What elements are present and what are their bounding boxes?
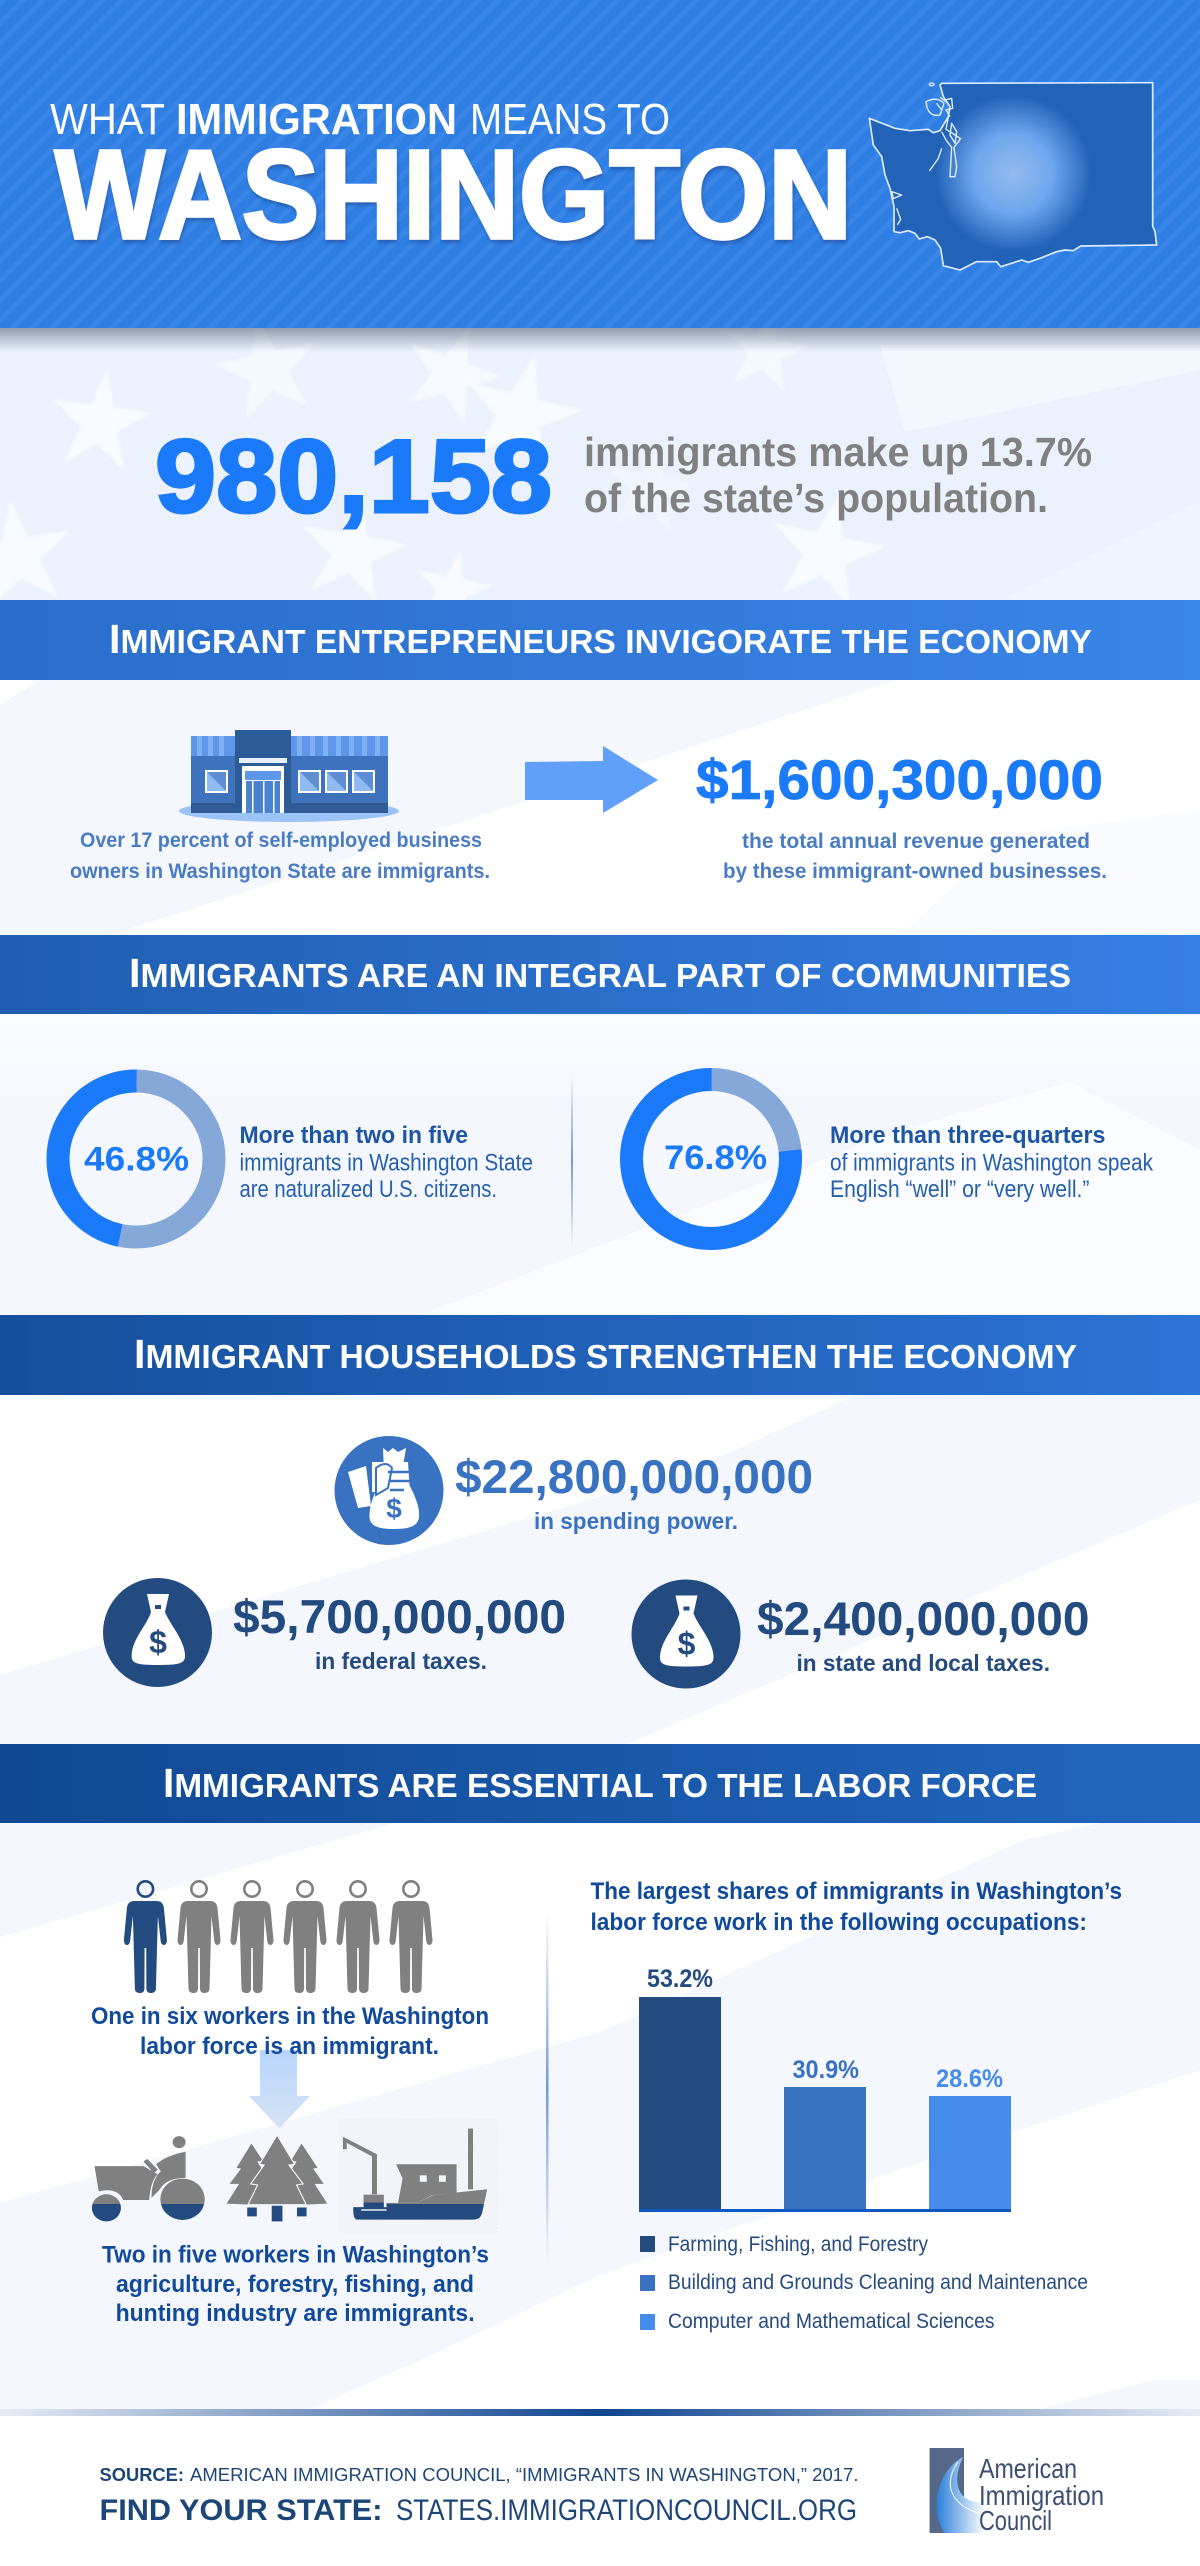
chart heading: The largest shares of immigrants in Washington’s xyxy=(590,1878,1122,1905)
stat description: immigrants make up 13.7% xyxy=(584,429,1092,475)
section header: labor force xyxy=(0,1744,1200,1823)
section header: households: IMMIGRANT HOUSEHOLDS STRENGTHEN THE ECONOMY xyxy=(134,1331,1077,1377)
title line 1: WHAT xyxy=(50,96,165,144)
stat description: of the state’s population. xyxy=(584,475,1048,521)
icon: tractor xyxy=(92,2136,205,2221)
find your state line: STATES.IMMIGRATIONCOUNCIL.ORG xyxy=(396,2494,857,2527)
text: self-employed business owners: Over 17 percent of self-employed business xyxy=(80,828,482,852)
chart heading: labor force work in the following occupations: xyxy=(590,1909,1087,1936)
icon: storefront xyxy=(179,730,399,822)
federal taxes figure: in federal taxes. xyxy=(315,1648,487,1674)
stat description xyxy=(584,429,1092,521)
logo: American Immigration Council: Council xyxy=(979,2505,1052,2536)
donut chart: 76.8 percent xyxy=(632,1080,790,1238)
footer xyxy=(100,2448,1104,2536)
logo: American Immigration Council: American xyxy=(979,2453,1077,2484)
text: one in six workers xyxy=(91,2003,489,2060)
source line: AMERICAN IMMIGRATION COUNCIL, “IMMIGRANTS IN WASHINGTON,” 2017. xyxy=(190,2465,858,2485)
icon: money bag in hand: $ xyxy=(386,1493,402,1524)
section header: households xyxy=(0,1315,1200,1395)
section header: entrepreneurs xyxy=(0,600,1200,680)
federal taxes figure: $5,700,000,000 xyxy=(233,1590,566,1643)
donut chart: 46.8 percent xyxy=(58,1081,214,1237)
find your state line: FIND YOUR STATE: xyxy=(100,2494,382,2527)
arrow: down xyxy=(249,2050,310,2128)
spending power figure xyxy=(455,1450,813,1534)
text: self-employed business owners xyxy=(70,828,490,883)
bar: building 30.9 xyxy=(784,2056,866,2212)
text: two in five workers: hunting industry are immigrants. xyxy=(116,2300,475,2327)
text: two in five workers xyxy=(102,2242,489,2327)
section header: communities xyxy=(0,935,1200,1014)
text: English proficiency xyxy=(830,1122,1154,1203)
bar: farming 53.2: 53.2% xyxy=(647,1965,713,1993)
donut chart: 46.8 percent: 46.8% xyxy=(84,1140,189,1178)
legend: Computer and Mathematical Sciences xyxy=(668,2310,994,2333)
text: English proficiency: of immigrants in Washington speak xyxy=(830,1150,1154,1176)
icon: money bag state xyxy=(632,1580,740,1688)
arrow xyxy=(525,746,658,813)
text: naturalized citizens: immigrants in Washington State xyxy=(240,1150,533,1176)
text: naturalized citizens xyxy=(240,1122,533,1203)
stat number: 980,158 xyxy=(155,419,552,535)
text: naturalized citizens: More than two in five xyxy=(240,1122,468,1149)
text: one in six workers: labor force is an immigrant. xyxy=(140,2033,439,2060)
bar: building 30.9: 30.9% xyxy=(792,2056,859,2084)
state and local taxes figure: $2,400,000,000 xyxy=(757,1592,1090,1645)
legend: Building and Grounds Cleaning and Maintenance xyxy=(668,2271,1088,2294)
text: English proficiency: English “well” or “very well.” xyxy=(830,1176,1090,1203)
spending power figure: in spending power. xyxy=(534,1508,738,1534)
legend: Farming, Fishing, and Forestry xyxy=(668,2233,928,2256)
panel: labor force left xyxy=(91,1881,498,2327)
source line: SOURCE: xyxy=(100,2465,184,2485)
state and local taxes figure xyxy=(757,1592,1090,1676)
state and local taxes figure: in state and local taxes. xyxy=(796,1650,1050,1676)
text: two in five workers: agriculture, forestry, fishing, and xyxy=(116,2271,474,2298)
title: WASHINGTON: WASHINGTON xyxy=(55,124,852,265)
icon: six workers, one highlighted xyxy=(124,1881,433,1993)
panel: entrepreneurs xyxy=(70,730,1107,883)
legend xyxy=(640,2233,1088,2333)
headline statistic xyxy=(155,419,1092,535)
text: English proficiency: More than three-quarters xyxy=(830,1122,1106,1149)
icon: fishing boat xyxy=(339,2119,498,2233)
text: naturalized citizens: are naturalized U.S. citizens. xyxy=(240,1176,497,1203)
text: revenue description: by these immigrant-owned businesses. xyxy=(723,859,1107,883)
spending power figure: $22,800,000,000 xyxy=(455,1450,813,1503)
bar chart xyxy=(639,1965,1011,2212)
text: self-employed business owners: owners in Washington State are immigrants. xyxy=(70,859,490,883)
donut chart: 76.8 percent: 76.8% xyxy=(664,1139,767,1177)
icons: farming, forestry, fishing xyxy=(92,2119,498,2233)
icon: money bag in hand xyxy=(334,1436,444,1545)
federal taxes figure xyxy=(233,1590,566,1674)
section header: labor force: IMMIGRANTS ARE ESSENTIAL TO THE LABOR FORCE xyxy=(163,1760,1037,1806)
panel: occupations xyxy=(590,1878,1122,2333)
revenue number: $1,600,300,000 xyxy=(696,748,1103,811)
chart heading xyxy=(590,1878,1122,1936)
find your state line xyxy=(100,2494,857,2527)
text: two in five workers: Two in five workers in Washington’s xyxy=(102,2242,489,2268)
text: revenue description xyxy=(723,829,1107,883)
icon: money bag federal: $ xyxy=(149,1624,167,1660)
section header: entrepreneurs: IMMIGRANT ENTREPRENEURS INVIGORATE THE ECONOMY xyxy=(109,616,1092,662)
logo: American Immigration Council xyxy=(930,2448,1104,2536)
bar: computer 28.6 xyxy=(929,2065,1011,2212)
title line 1: IMMIGRATION xyxy=(176,96,457,144)
title line 1 xyxy=(50,96,670,144)
panel: communities xyxy=(58,1075,1154,1247)
title line 1: MEANS TO xyxy=(470,96,670,144)
icon: trees xyxy=(227,2135,327,2221)
text: revenue description: the total annual revenue generated xyxy=(742,829,1090,853)
bar: computer 28.6: 28.6% xyxy=(936,2065,1003,2093)
icon: money bag federal xyxy=(103,1578,212,1687)
logo: American Immigration Council: Immigration xyxy=(979,2480,1104,2511)
text: one in six workers: One in six workers in the Washington xyxy=(91,2003,489,2030)
icon: money bag state: $ xyxy=(678,1626,696,1662)
panel: households xyxy=(103,1436,1090,1688)
icon: Washington State map xyxy=(869,83,1157,270)
bar: farming 53.2 xyxy=(639,1965,721,2212)
header banner xyxy=(0,0,1200,352)
section header: communities: IMMIGRANTS ARE AN INTEGRAL PART OF COMMUNITIES xyxy=(129,950,1071,996)
